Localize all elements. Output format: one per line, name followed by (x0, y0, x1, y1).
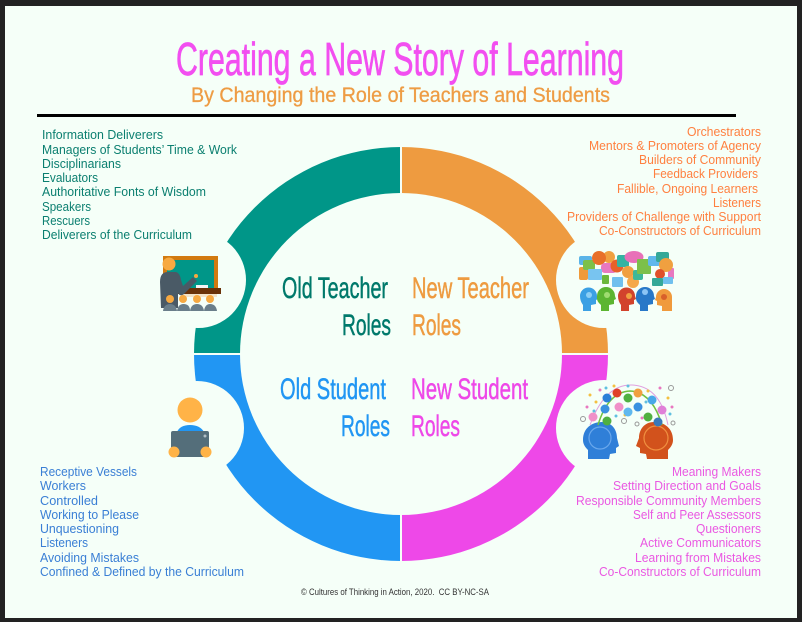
list: old student roles: Unquestioning (40, 522, 119, 536)
list: new student roles: Meaning Makers (672, 465, 761, 479)
icon: student with tablet (168, 398, 212, 458)
center label: new teacher roles (412, 272, 529, 342)
list: old student roles: Confined & Defined by the Curriculum (40, 565, 244, 579)
center label: new teacher roles: Roles (412, 309, 461, 342)
list: new teacher roles: Feedback Providers (653, 167, 758, 181)
ring segment: old teacher (194, 147, 401, 354)
ring diagram (140, 145, 686, 563)
list: new teacher roles: Listeners (713, 196, 761, 210)
ring segment: new student (401, 354, 608, 561)
list: old teacher roles (42, 128, 238, 242)
list: new student roles: Learning from Mistakes (635, 551, 761, 565)
list: old teacher roles: Speakers (42, 200, 91, 214)
copyright footer: © Cultures of Thinking in Action, 2020. CC BY-NC-SA (301, 587, 490, 598)
list: old student roles: Receptive Vessels (40, 465, 137, 479)
center label: old teacher roles: Roles (342, 309, 391, 342)
center label: old teacher roles (282, 272, 391, 342)
icon: two heads sharing ideas (580, 384, 675, 459)
center label: new teacher roles: New Teacher (412, 272, 529, 305)
ring segment: old student (194, 354, 401, 561)
list: new student roles: Setting Direction and Goals (613, 479, 761, 493)
list: new teacher roles: Fallible, Ongoing Learners (617, 182, 758, 196)
list: old teacher roles: Managers of Students’ Time & Work (42, 143, 238, 157)
list: new teacher roles: Mentors & Promoters of Agency (589, 139, 762, 153)
list: old student roles: Listeners (40, 536, 88, 550)
center label: old teacher roles: Old Teacher (282, 272, 388, 305)
center label: new student roles (411, 373, 528, 443)
list: new teacher roles: Co-Constructors of Curriculum (599, 224, 761, 238)
list: new student roles: Responsible Community Members (576, 494, 761, 508)
list: old teacher roles: Authoritative Fonts of Wisdom (42, 185, 206, 199)
subtitle: By Changing the Role of Teachers and Students (191, 84, 610, 107)
center label: new student roles: New Student (411, 373, 528, 406)
list: new teacher roles: Builders of Community (639, 153, 762, 167)
list: old teacher roles: Evaluators (42, 171, 98, 185)
list: old teacher roles: Information Deliverers (42, 128, 163, 142)
list: new student roles: Co-Constructors of Curriculum (599, 565, 761, 579)
list: old teacher roles: Disciplinarians (42, 157, 121, 171)
center label: new student roles: Roles (411, 410, 460, 443)
icon: speech bubbles and heads (579, 251, 674, 311)
center label: old student roles (280, 373, 390, 443)
list: new teacher roles (567, 125, 762, 238)
list: new teacher roles: Providers of Challenge with Support (567, 210, 762, 224)
list: old student roles: Avoiding Mistakes (40, 551, 139, 565)
list: new student roles: Self and Peer Assessors (633, 508, 761, 522)
center label: old student roles: Roles (341, 410, 390, 443)
ring segment: new teacher (401, 147, 608, 354)
list: new student roles (576, 465, 761, 579)
list: old student roles: Controlled (40, 494, 98, 508)
list: old student roles: Workers (40, 479, 86, 493)
list: old teacher roles: Deliverers of the Curriculum (42, 228, 192, 242)
icon: teacher at chalkboard (160, 256, 221, 311)
list: old student roles: Working to Please (40, 508, 139, 522)
list: new teacher roles: Orchestrators (687, 125, 761, 139)
list: new student roles: Questioners (696, 522, 761, 536)
list: new student roles: Active Communicators (640, 536, 761, 550)
list: old teacher roles: Rescuers (42, 214, 90, 228)
center label: old student roles: Old Student (280, 373, 386, 406)
list: old student roles (40, 465, 244, 579)
